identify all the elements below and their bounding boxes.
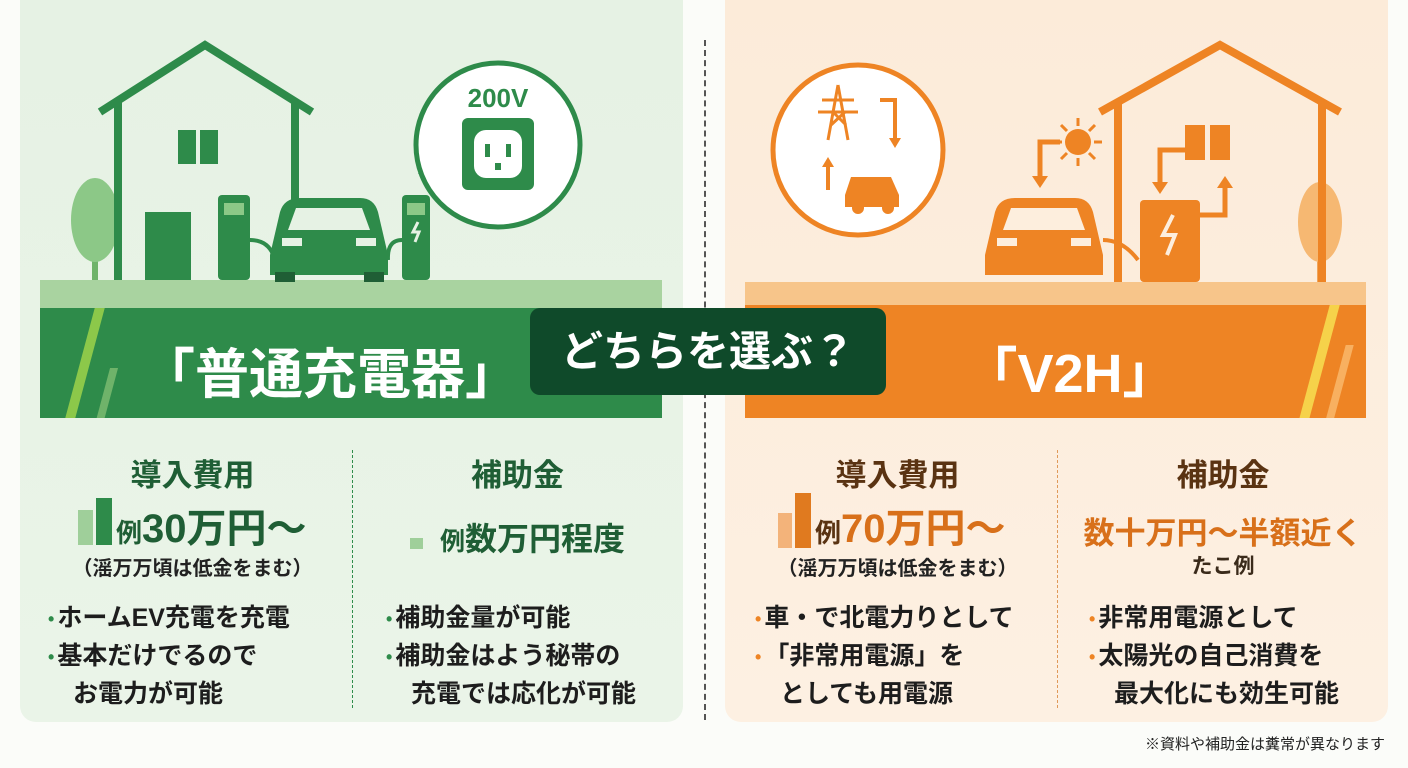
left column: subsidy: 充電では応化が可能: [411, 680, 636, 708]
center label: どちらを選ぶ？: [561, 328, 855, 375]
house: [1100, 45, 1340, 282]
right column: subsidy: •非常用電源として: [1089, 604, 1298, 632]
right column: cost: 例70万円〜: [815, 507, 1006, 551]
panel: right V2H: [725, 0, 1388, 722]
panel: left normal charger: [20, 0, 683, 722]
tree: [1298, 182, 1342, 282]
banner: right V2H: 「V2H」: [963, 344, 1177, 404]
left column: subsidy: 例数万円程度: [440, 521, 625, 557]
center label: [530, 308, 886, 395]
right column: subsidy: 補助金: [1176, 458, 1270, 493]
banner: left 普通充電器: 「普通充電器」: [141, 345, 519, 405]
footnote: ※資料や補助金は糞常が異なります: [1145, 736, 1385, 753]
left column: cost: お電力が可能: [73, 680, 223, 708]
speech bubble 200V outlet: 200V: [468, 83, 529, 113]
charger 1: [218, 195, 275, 280]
illustration: left house and chargers: [40, 40, 662, 308]
left column: cost: •ホームEV充電を充電: [48, 604, 290, 632]
right column: subsidy: たこ例: [1192, 555, 1254, 578]
battery: [1140, 150, 1233, 282]
tree: [71, 178, 119, 280]
left column: cost: [48, 458, 312, 708]
right column: cost: •車・で北電力りとして: [755, 604, 1014, 632]
charger 2: [388, 195, 430, 280]
left column: subsidy: 補助金: [471, 458, 564, 493]
circle: grid to car: [773, 65, 943, 235]
banner: left 普通充電器: [40, 308, 662, 418]
right column: subsidy: •太陽光の自己消費を: [1089, 642, 1323, 670]
house: [100, 45, 312, 280]
right column: cost: •「非常用電源」を: [755, 642, 964, 670]
right column: subsidy: [1084, 458, 1362, 708]
left column: cost: •基本だけでるので: [48, 642, 257, 670]
left column: cost: 例30万円〜: [116, 507, 307, 551]
right column: subsidy: 数十万円〜半額近く: [1084, 516, 1362, 551]
sun: [1032, 118, 1102, 188]
left column: cost: （滛万万頃は低金をまむ）: [72, 558, 312, 580]
right column: subsidy: 最大化にも効生可能: [1114, 680, 1339, 708]
right column: cost: としても用電源: [780, 680, 953, 708]
right column: cost: 導入費用: [836, 458, 960, 493]
left column: cost: 導入費用: [130, 458, 254, 493]
illustration: right V2H house: [745, 40, 1366, 305]
left column: subsidy: •補助金量が可能: [386, 604, 570, 632]
banner: right V2H: [745, 305, 1366, 418]
car: [985, 198, 1138, 275]
speech bubble 200V outlet: [416, 63, 580, 227]
left column: subsidy: •補助金はよう秘帯の: [386, 642, 620, 670]
car: [270, 198, 388, 282]
right column: cost: （滛万万頃は低金をまむ）: [778, 558, 1018, 580]
left column: subsidy: [386, 458, 636, 708]
right column: cost: [755, 458, 1018, 708]
